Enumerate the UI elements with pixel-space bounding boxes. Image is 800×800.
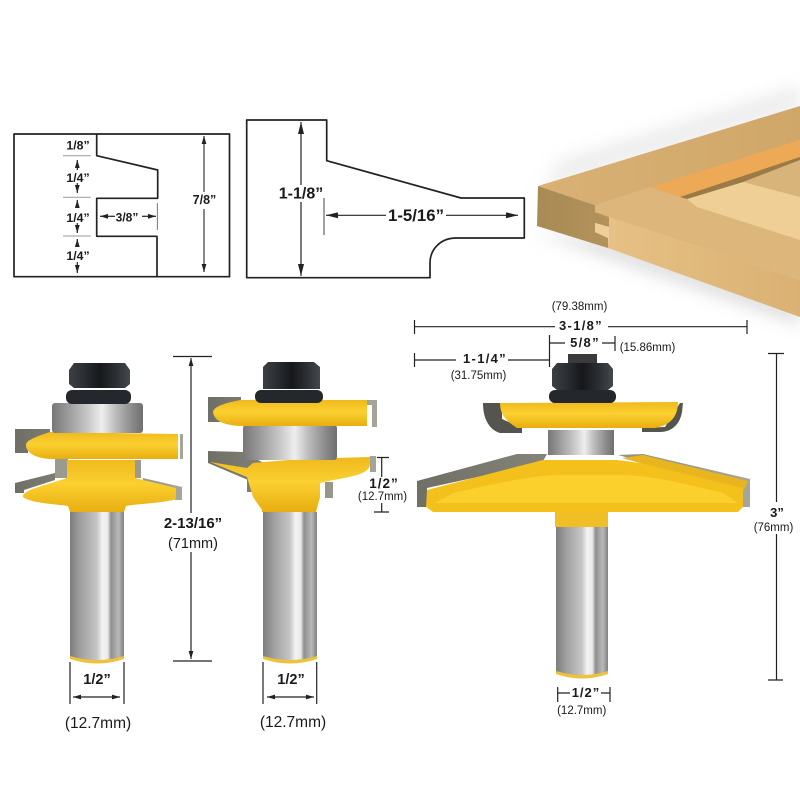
label: metric: (12.7mm) [557, 705, 606, 717]
light panel bevel [687, 182, 800, 240]
profile diagram: rail and stile tongue and groove [14, 134, 230, 277]
label: half inch: 1/2” [369, 476, 399, 491]
label: 1-1/4: 1-1/4” [463, 351, 507, 366]
end grain joint [537, 186, 609, 248]
shank tip [263, 650, 317, 664]
upper cutters [208, 397, 377, 427]
label: metric: (76mm) [754, 522, 793, 534]
router bit 1: tongue cutter [15, 363, 183, 664]
lower yellow body [210, 457, 370, 512]
label: 3 inch: 3” [770, 505, 784, 520]
lower yellow body [23, 460, 176, 512]
label: 1-5/16: 1-5/16” [388, 206, 444, 225]
label: half inch: 1/2” [572, 685, 600, 700]
dimension: bit 2 groove height [358, 458, 407, 512]
profile diagram: raised panel [247, 120, 524, 278]
label: metric: (31.75mm) [451, 370, 506, 382]
lower right yellow bevel edge [622, 455, 748, 492]
dimension: bit 2 shank diameter [260, 662, 326, 731]
dimension: bit 3 overall height [754, 353, 793, 680]
label: 1/4 upper: 1/4” [66, 171, 90, 185]
shank tip [556, 665, 608, 678]
top surface [538, 106, 800, 280]
label: 1/4 lower: 1/4” [66, 249, 90, 263]
label: half inch: 1/2” [277, 672, 305, 688]
upper yellow wing [26, 432, 178, 459]
orange groove [650, 140, 800, 197]
upper cutters [483, 403, 683, 433]
label: height: 2-13/16” [164, 515, 222, 532]
label: 3-1/8: 3-1/8” [559, 318, 603, 333]
bearing [52, 403, 143, 433]
label: metric: (79.38mm) [552, 301, 607, 313]
washer [549, 390, 616, 403]
photo: assembled wood frame corner [534, 85, 800, 325]
upper yellow wing [213, 400, 367, 426]
label: height metric: (71mm) [168, 536, 218, 552]
lower body highlight [435, 475, 738, 503]
shank tip [70, 650, 124, 664]
dark recessed panel [743, 158, 800, 197]
router bit 3: raised panel cutter [417, 354, 750, 678]
nut [69, 363, 130, 388]
shank [263, 512, 317, 660]
washer [255, 390, 323, 403]
neck [555, 510, 608, 527]
lower cutters [417, 454, 750, 507]
front rail area [595, 187, 800, 280]
front face [608, 217, 800, 317]
dimension: bit 3 shank diameter [557, 685, 610, 717]
label: metric: (12.7mm) [65, 715, 131, 732]
upper yellow wing [500, 402, 678, 428]
dimension: bit 3 bearing [549, 335, 675, 367]
router bit 2: groove cutter [208, 362, 377, 664]
lower cutters [15, 473, 182, 500]
label: 7/8: 7/8” [193, 193, 216, 207]
lower yellow bevel body [426, 460, 743, 512]
upper cutters [15, 429, 183, 459]
label: metric: (15.86mm) [620, 342, 675, 354]
groove shadow [680, 157, 800, 199]
label: metric: (12.7mm) [358, 491, 407, 503]
thread [568, 354, 597, 364]
dimension: bit 1 overall height [164, 356, 222, 661]
dimension: bit 3 overall diameter [414, 301, 747, 334]
washer [66, 390, 131, 404]
shank [556, 527, 608, 675]
label: 5/8: 5/8” [570, 335, 600, 350]
bearing [243, 425, 337, 460]
nut [263, 362, 320, 389]
nut [552, 363, 613, 390]
joint tongue [595, 223, 609, 238]
lower cutters [208, 451, 376, 498]
label: metric: (12.7mm) [260, 714, 326, 731]
bearing [548, 430, 614, 455]
label: 3/8: 3/8” [116, 210, 138, 224]
label: 1/4 middle: 1/4” [66, 211, 90, 225]
dimension: bit 1 shank diameter [65, 662, 131, 732]
label: 1/8: 1/8” [66, 138, 90, 152]
dimension: bit 3 cutter overhang [414, 351, 549, 382]
label: 1-1/8: 1-1/8” [279, 186, 323, 203]
label: half inch: 1/2” [83, 672, 111, 688]
shank [70, 512, 124, 660]
